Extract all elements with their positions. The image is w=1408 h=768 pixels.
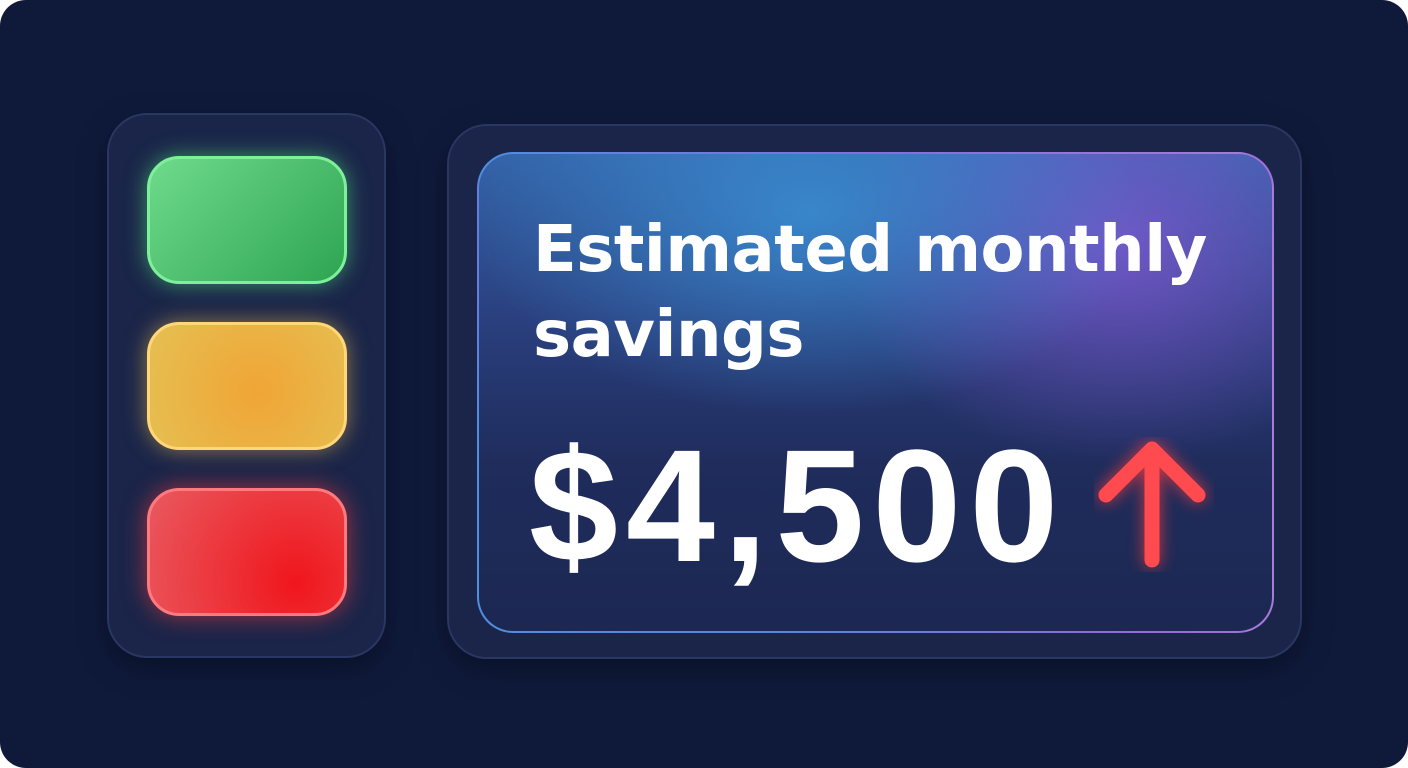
panel: status lights	[107, 113, 386, 658]
heading: savings	[533, 298, 804, 372]
savings card	[477, 152, 1274, 633]
icon: red up arrow	[1094, 437, 1214, 572]
heading: Estimated monthly	[533, 213, 1207, 287]
green light	[147, 156, 347, 284]
heading	[533, 213, 1207, 372]
yellow light	[147, 322, 347, 450]
panel: savings	[447, 124, 1302, 659]
red light	[147, 488, 347, 616]
value: $4,500	[529, 416, 1066, 595]
